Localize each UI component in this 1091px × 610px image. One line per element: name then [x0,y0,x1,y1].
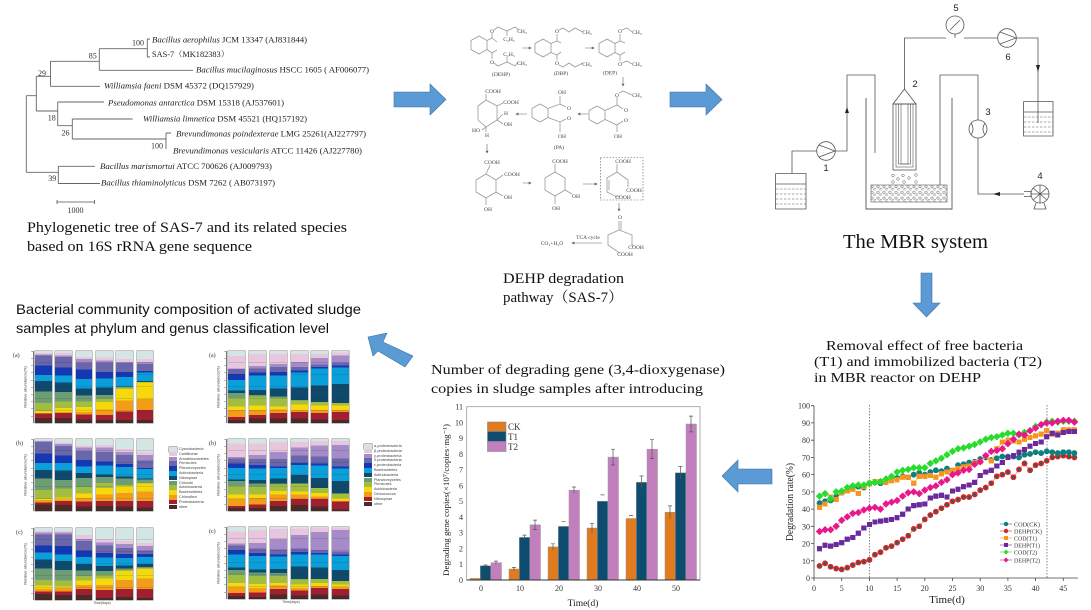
heading: removal effect: (T1) and immobilized bacteria (T2) [814,355,1042,370]
line tick labels: 20 [802,540,810,548]
pathway labels: O [618,62,622,68]
pathway labels: TCA cycle [576,235,600,241]
legend: genus: ε-proteobacteria [374,463,401,467]
pathway labels: COOH [485,89,501,95]
T2 bars [491,424,696,580]
tree species labels [100,35,369,188]
tree species labels: Williamsia faeni DSM 45372 (DQ157929) [104,82,254,91]
component numbers: 3 [985,107,991,118]
bootstrap values: 26 [62,128,70,138]
line tick labels: 40 [1032,584,1040,593]
pathway labels: COOH [617,252,633,258]
line legend: DEHP(T1) [1014,542,1040,550]
pathway labels: CH₃ [632,30,642,36]
bar tick labels: 5 [459,497,463,506]
dotted phase lines [869,405,1047,578]
stacked bars: phylum panel a [13,350,154,424]
stacked bars: phylum panel b [16,438,154,512]
legend: genus: other [374,502,383,506]
arrow: pathway to MBR [670,84,722,115]
pathway labels: OH [504,195,512,201]
piping [792,34,1038,194]
bar tick labels: 10 [455,418,463,427]
panel: phylogenetic tree [26,35,369,215]
line tick labels: 100 [798,402,810,411]
line tick labels: 80 [802,436,810,445]
bar tick labels: 1 [459,560,463,569]
pathway labels: OH [614,134,622,140]
stacked bars: genus panel a: (a) [209,353,216,359]
tree species labels: Bacillus aerophilus JCM 13347 (AJ831844) [152,35,307,44]
stacked bars: phylum panel c: (c) [16,530,23,536]
line legend: COD(T2) [1014,550,1037,556]
heading: removal effect [814,339,1042,386]
molecule: dihydroxy phthalate [476,165,503,205]
tree species labels: Pseudomonas antarctica DSM 15318 (AJ537601) [107,98,284,107]
line tick labels: 70 [802,453,810,462]
pathway labels: O [618,29,622,35]
legend: genus [364,444,402,506]
bar frame [467,407,700,580]
line tick labels: 20 [921,584,929,593]
data series [820,420,1074,569]
caption: phylogenetic tree: based on 16S rRNA gene sequence [27,239,252,255]
line axis titles: Time(d) [929,594,965,606]
component numbers [823,3,1043,182]
caption: phylogenetic tree: Phylogenetic tree of SAS-7 and its related species [27,220,347,236]
pathway labels: OH [504,122,512,128]
line legend: COD(T1) [1014,536,1037,542]
heading: community composition [16,301,361,336]
component numbers: 6 [1005,52,1011,63]
pathway labels: OH [484,207,492,213]
reactor tank [866,98,952,209]
aerator [871,185,947,202]
heading: gene copies: Number of degrading gene (3,4-dioxygenase) [431,363,725,378]
stacked bars: genus panel a: Relative abundance(%) [216,366,220,408]
pathway labels: COOH [504,172,520,178]
stacked bars: phylum panel c: Relative abundance(%) [22,543,28,585]
pathway labels: COOH [503,100,519,106]
error bars [484,416,693,570]
pathway labels: (PA) [554,144,564,151]
line tick labels: 15 [893,584,901,593]
line legend: COD(CK) [1014,522,1040,528]
bar tick labels: 40 [633,584,641,593]
pathway labels: COOH [628,245,644,251]
line axes [811,406,1078,581]
tree species labels: Bacillus thiaminolyticus DSM 7262 ( AB073197) [101,179,275,188]
pathway labels: O [624,108,628,114]
pathway arrows [486,47,624,244]
pump 6 [998,29,1016,47]
membrane module [893,89,916,170]
legend: genus: δ-proteobacteria [374,458,402,462]
bar tick labels: 0 [459,576,463,585]
pathway labels: COOH [615,195,631,201]
pathway labels: CH₃ [582,62,592,68]
pathway labels: O [567,116,571,122]
legend: phylum: Chloroflexi [179,495,197,499]
stacked bars: genus panel b: (b) [209,441,216,447]
pathway labels: H [485,133,489,139]
tree species labels: Brevundimonas vesicularis ATCC 11426 (AJ227780) [173,146,362,155]
caption: DEHP pathway: DEHP degradation [503,271,625,287]
tree species labels: Williamsia limnetica DSM 45521 (HQ157192) [143,115,307,124]
caption: DEHP pathway: pathway（SAS-7） [503,289,623,306]
bar legend: T1 [508,432,518,442]
bar axis titles [441,424,598,609]
bar tick labels: 8 [459,450,463,459]
heading: community composition: Bacterial community composition of activated sludge [16,301,361,317]
tree species labels: Brevundimonas poindexterae LMG 25261(AJ227797) [176,129,366,138]
pathway labels: HO [472,128,480,134]
bubbles [892,174,917,183]
pathway labels: (DBP) [554,70,568,77]
stacked bars: genus panel c: (c) [209,529,216,535]
component numbers: 1 [823,163,829,174]
component numbers: 4 [1037,171,1043,182]
legend: genus: α-proteobacteria [374,444,402,448]
line tick labels: 10 [865,584,873,593]
bar legend [488,422,521,452]
heading: community composition: samples at phylum and genus classification level [16,320,329,336]
heading: removal effect: Removal effect of free bacteria [826,339,1024,354]
pathway labels: OH [558,90,566,96]
pathway labels: CH₃ [632,62,642,68]
line chart: degradation rate [784,402,1078,606]
arrow: tree to pathway [394,84,446,115]
arrow: removal chart to gene chart [722,460,772,492]
tree branches [26,39,193,184]
legend: phylum: Armatimonadetes [179,457,209,461]
legend: phylum: other [179,505,188,509]
pathway labels: CH₃ [582,30,592,36]
legend: phylum [168,446,209,509]
legend: phylum: Cyanobacteria [179,447,203,451]
molecule: PA [532,96,566,132]
inlet beaker [776,174,806,209]
molecule: protocatechuate [545,164,572,204]
arrow: gene chart to community [368,333,413,367]
bar tick labels [455,403,680,593]
legend: phylum: Chlorobi [179,481,193,485]
line tick labels: 90 [802,419,810,428]
pathway labels: CH₃ [632,93,642,99]
legend: phylum: Nitrospirae [179,476,197,480]
heading: gene copies: copies in sludge samples after introducing [431,382,703,397]
gauge 5 [946,16,964,34]
legend: phylum: Planctomycetes [179,466,206,470]
bar tick labels: 30 [594,584,602,593]
stacked bars: phylum panel b: (b) [16,441,23,447]
line tick labels: 30 [976,584,984,593]
CK bars [470,512,675,580]
line tick labels: 5 [840,584,844,593]
bar tick labels: 7 [459,466,463,475]
pathway labels: OH [558,134,566,140]
bar legend: CK [508,422,521,432]
legend: genus: Actinobacteria [374,473,398,477]
legend: phylum: Proteobacteria [179,500,204,504]
pathway labels: (DEHP) [492,71,510,78]
flowmeter 3 [969,120,987,138]
legend: genus: γ-proteobacteria [374,454,401,458]
legend: phylum: Acidobacteria [179,485,202,489]
molecule: monoethyl phthalate [589,91,632,132]
pathway labels: COOH [626,188,642,194]
text: Time(days) [282,600,300,604]
panel: DEHP degradation pathway [471,27,644,258]
blower 4 [1024,185,1049,209]
legend: genus: Acidobacteria [374,487,397,491]
molecule: DEHP [471,27,519,66]
legend: phylum: Actinobacteria [179,471,203,475]
line tick labels: 30 [802,522,810,531]
bar tick labels: 11 [455,403,463,412]
pathway labels: O [624,118,628,124]
legend: genus: Planctomycetes [374,478,401,482]
stacked bars: phylum panel a: (a) [13,353,20,359]
molecule: 3-oxoadipate [608,221,634,253]
scale bar [57,200,94,215]
line legend [1000,522,1042,564]
bar tick labels: 4 [459,513,463,522]
legend: phylum: Bacteroidetes [179,490,202,494]
stacked bars: genus panel b [209,438,350,512]
line tick labels: 0 [812,584,816,593]
bar tick labels: 2 [459,544,463,554]
caption: MBR system: The MBR system [843,231,988,253]
bar axis titles: Degrading gene copies(×10⁷/copies·mg⁻¹) [441,424,451,576]
caption: phylogenetic tree [27,220,347,255]
bootstrap values: 85 [89,52,97,60]
bootstrap values: 18 [48,114,56,122]
arrow: MBR to removal chart [913,273,940,317]
pathway labels: O [490,29,494,35]
component numbers: 2 [912,79,918,90]
bar axis line [467,579,700,581]
text: Time(days) [93,600,111,604]
pathway labels: O [615,93,619,99]
line tick labels: 60 [802,471,810,480]
bar tick labels: 20 [555,584,563,593]
pathway labels: OH [572,194,580,200]
line tick labels: 45 [1059,584,1067,593]
bootstrap values [38,38,163,183]
line tick labels: 35 [1004,584,1012,593]
molecule: DEP [599,28,632,64]
bar tick labels: 10 [516,584,524,593]
legend: genus: Firmicutes [374,482,392,486]
legend: genus: Bacteroidetes [374,468,397,472]
bar legend: T2 [508,442,518,452]
stacked bars: phylum panel c [16,528,154,605]
component numbers: 5 [953,3,959,14]
legend: genus: β-proteobacteria [374,449,402,453]
tree species labels: Bacillus mucilaginosus HSCC 1605 ( AF006077) [196,66,369,74]
pathway labels [472,29,644,258]
pathway labels: O [567,106,571,112]
line legend: DEHP(CK) [1014,528,1042,536]
bar tick labels: 50 [672,584,680,593]
pathway labels: O [555,61,559,67]
pathway labels: OH [552,206,560,212]
bar tick labels: 9 [459,434,463,443]
stacked bars: phylum panel a: Relative abundance(%) [22,366,28,408]
molecule: ring-opened intermediate [600,158,643,200]
stacked bars: phylum panel b: Relative abundance(%) [22,454,28,496]
bar tick labels: 3 [459,529,463,538]
legend: genus: Deinococcus [374,492,396,496]
legend: phylum: Firmicutes [179,461,197,465]
scale bar: 1000 [68,206,84,215]
line tick labels: 0 [806,574,810,583]
stacked bars: genus panel b: Relative abundance(%) [216,454,220,496]
outlet beaker [1024,102,1053,136]
line tick labels: 10 [802,557,810,566]
stacked bars: genus panel a [209,350,350,424]
bar tick labels: 0 [479,584,483,593]
stacked bars: genus panel c [209,526,350,604]
pump 1 [817,142,835,160]
line axis titles: Degradation rate(%) [784,463,796,541]
bar axis titles: Time(d) [568,598,598,609]
line axis titles [784,463,965,606]
pathway labels: O [490,60,494,66]
line legend: DEHP(T2) [1014,558,1040,564]
heading: gene copies [431,363,725,397]
caption: DEHP pathway [503,271,625,306]
pathway labels: O [555,29,559,35]
pathway labels: CH₃ [517,61,527,67]
heading: removal effect: in MBR reactor on DEHP [814,371,981,386]
bootstrap values: 100 [132,38,144,48]
panel: MBR system diagram [776,3,1053,209]
legend: phylum: Caldilineae [179,452,198,456]
line tick labels: 25 [948,584,956,593]
bar chart: degrading gene copies [441,403,700,609]
flow arrowheads [845,65,1040,196]
pathway labels: O [618,215,622,221]
pathway labels: H [504,111,508,117]
T1 bars [480,473,686,580]
bootstrap values: 29 [38,69,46,78]
bootstrap values: 39 [48,174,56,183]
bootstrap values: 100 [151,142,163,150]
pathway labels: (DEP) [603,70,617,76]
pathway labels: COOH [552,159,568,165]
tree species labels: SAS-7（MK182383） [152,50,229,59]
pathway labels: CO₂+H₂O [541,241,563,247]
pathway labels: COOH [615,159,631,165]
stacked bars: genus panel c: Relative abundance(%) [216,542,220,584]
pathway labels: C₂H₅ [503,52,515,58]
bar tick labels: 6 [459,481,463,490]
molecule: DBP [535,28,583,67]
pathway labels: C₂H₅ [503,37,515,43]
tree species labels: Bacillus marismortui ATCC 700626 (AJ009793) [100,162,272,171]
molecule: dihydrodiol [478,94,503,132]
line tick labels: 50 [802,488,810,497]
line tick labels [798,402,1067,593]
pathway labels: CH₃ [517,29,527,35]
line tick labels: 40 [802,505,810,514]
legend: genus: Nitrospirae [374,497,392,501]
pathway labels: COOH [484,160,500,166]
